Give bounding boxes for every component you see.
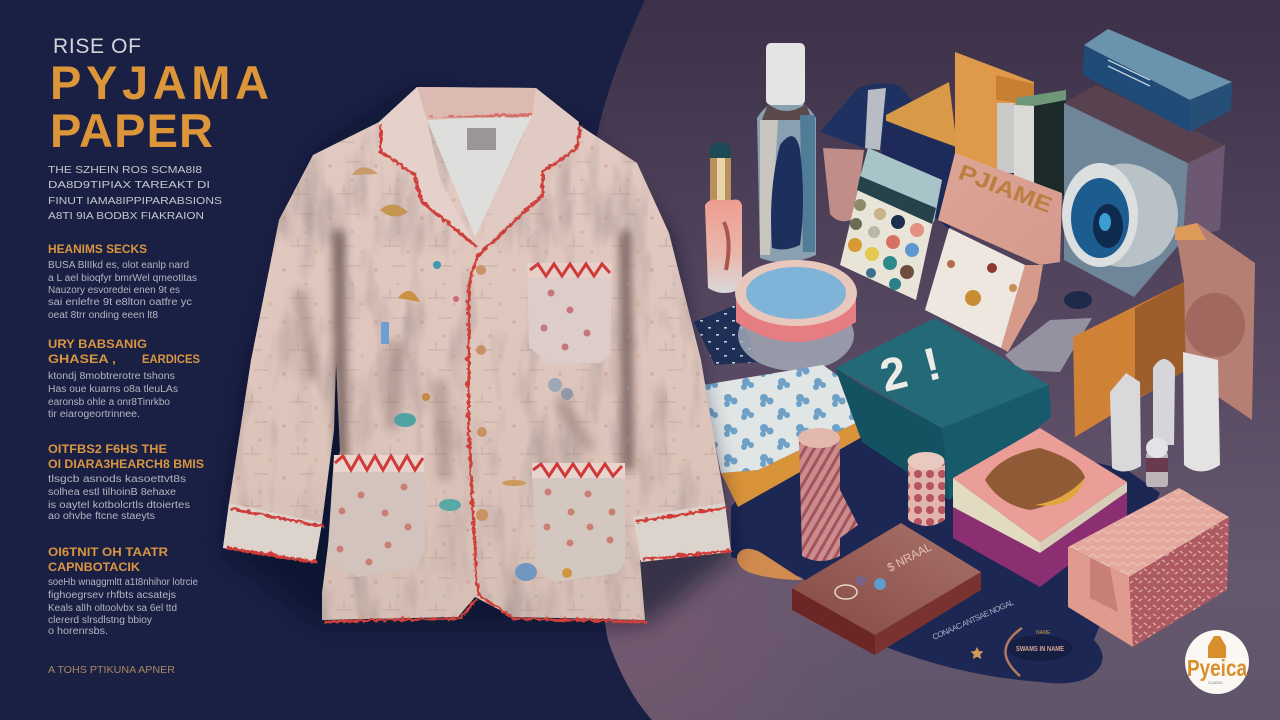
floral box [703,365,862,507]
plastic film [1005,318,1092,372]
section 3 text [48,444,204,522]
navy card [880,120,957,230]
small fabric roll [908,452,945,526]
section 3 text: OI DIARA3HEARCH8 BMIS [48,459,204,471]
section 1 text: oeat 8trr onding eeen lt8 [48,310,158,321]
title [50,35,269,157]
chest pocket [527,263,612,363]
section 1 text: sai enlefre 9t e8lton oatfre yc [48,297,192,308]
footer note: A TOHS PTIKUNA APNER [48,664,175,676]
section 2 text: tir eiarogeortrinnee. [48,409,140,420]
jacket fabric [223,87,731,620]
brown box [792,523,981,655]
intro text: FINUT IAMA8IPPIPARABSIONS [48,195,222,207]
dark pebble [1064,291,1092,309]
lipstick [705,142,742,293]
section 1 text [48,244,197,321]
right lapel [475,88,579,255]
blue top box [1083,29,1232,132]
jacket shadow [222,87,735,625]
section 1 text: Nauzory esvoredei enen 9t es [48,285,180,296]
pink pyjame box: PJIAME [955,159,1056,218]
section 1 text: a L ael bioqfyr bmrWel qmeotitas [48,273,197,284]
title: PYJAMA [50,56,269,109]
section 4 text: fighoegrsev rhfbts acsatejs [48,590,176,601]
mat crescent and label: SWAMS IN NAME [1016,646,1064,653]
neck label [467,128,496,150]
mat star [970,647,984,659]
buttons [476,265,488,521]
teal box [835,318,1051,500]
cosmetic tubes [1110,352,1220,487]
teal box: 2! [875,337,946,402]
collar band [417,87,536,120]
navy mat [731,430,1160,683]
background: mauve right panel [586,0,1280,720]
section 3 text: is oaytel kotbolcrtls dtoiertes [48,500,190,511]
intro text: DA8D9TIPIAX TAREAKT DI [48,179,210,191]
inner neck [427,115,532,237]
intro text: A8TI 9IA BODBX FIAKRAION [48,210,204,222]
section 2 text [48,339,200,420]
section 4 text: o horenrsbs. [48,626,108,637]
title: PAPER [50,104,213,157]
section 3 text: tlsgcb asnods kasoettvt8s [48,474,186,485]
logo badge: Pyeica [1187,655,1247,681]
silver blue cone and pink cup [820,83,912,221]
section 4 text: clererd slrsdlstng bbioy [48,615,152,626]
mat crescent and label [1005,628,1072,676]
orange patterned book [886,82,957,147]
pink stack box [953,428,1127,587]
intro text: THE SZHEIN ROS SCMA8I8 [48,164,202,176]
logo badge: CLASSIC [1208,681,1223,685]
section 4 text: CAPNBOTACIK [48,562,141,574]
fabric motifs [352,167,573,581]
palette card [840,148,942,300]
section 2 text: GHASEA , [48,354,116,366]
background: rose glow [586,0,1280,720]
lapel trim [379,122,579,255]
camera box [1062,85,1225,297]
right side: product collage [694,29,1255,683]
section 2 text: Has oue kuarns o8a tleuLAs [48,384,178,395]
intro text [48,164,222,222]
stacked books [997,90,1066,197]
brown box: $ NRAAL [885,540,934,575]
mat crescent and label: NAME [1036,630,1051,636]
white cap bottle [757,43,816,262]
section 3 text: ao ohvbe ftcne staeyts [48,511,155,522]
tall orange box [955,52,1034,170]
section 4 text: soeHb wnaggmltt a1t8nhihor lotrcie [48,577,198,588]
fabric shading [220,85,735,625]
section 2 text: earonsb ohle a onr8Tinrkbo [48,397,170,408]
orange booklets [1073,282,1186,437]
section 2 text: ktondj 8mobtrerotre tshons [48,371,175,382]
title: RISE OF [53,35,141,58]
section 4 text: Keals alIh oltoolvbx sa 6el ttd [48,603,177,614]
logo badge [1185,630,1249,694]
pink patterned box [1068,488,1229,647]
mauve book [1175,223,1255,420]
section 1 text: BUSA BlIIkd es, olot eanlp nard [48,260,189,271]
dotted navy mat piece [694,304,757,365]
section 4 text [48,547,198,637]
left cuff [223,503,322,563]
big fabric roll [798,428,858,561]
round tape [735,260,857,371]
section 3 text: solhea estl tilhoinB 8ehaxe [48,487,176,498]
mat small text: CONAAC ANTSAE NOGAL [931,598,1016,642]
section 4 text: OI6TNIT OH TAATR [48,547,169,559]
section 1 text: HEANIMS SECKS [48,244,147,256]
placket trim [322,255,645,620]
left lapel [379,87,475,245]
section 2 text: URY BABSANIG [48,339,147,351]
left lower pocket [327,453,425,577]
pink pyjame box [938,153,1062,265]
pyjama jacket [220,85,735,625]
white card [925,228,1043,352]
right lower pocket [532,463,625,582]
section 3 text: OITFBS2 F6HS THE [48,444,167,456]
right cuff [633,503,731,562]
spoon [737,549,803,580]
section 2 text: EARDICES [142,354,200,366]
